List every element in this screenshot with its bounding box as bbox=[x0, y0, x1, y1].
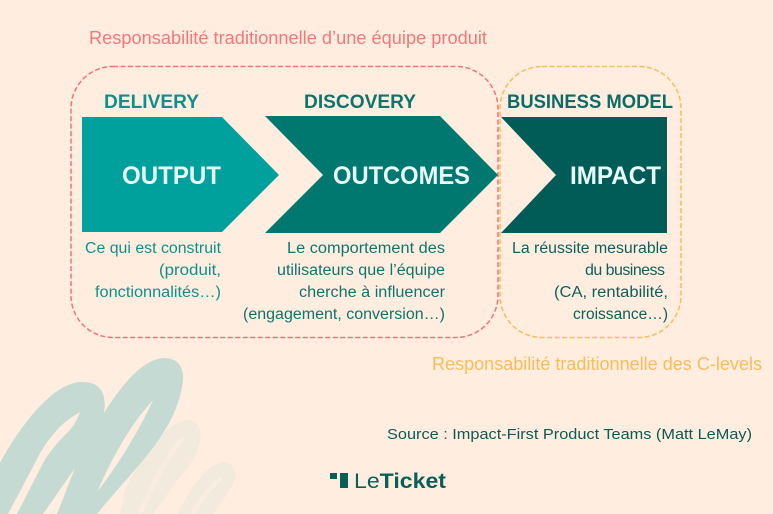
source note: Source : Impact-First Product Teams (Matt LeMay) bbox=[387, 426, 752, 443]
column: business model bbox=[501, 92, 673, 323]
description: impact: (CA, rentabilité, bbox=[554, 284, 668, 301]
description: impact: La réussite mesurable bbox=[512, 240, 668, 257]
arrow: outcomes bbox=[265, 116, 498, 233]
logo wordmark: LeTicket bbox=[354, 470, 446, 493]
description: impact: du business bbox=[585, 262, 665, 279]
heading: C-levels responsibility: Responsabilité traditionnelle des C-levels bbox=[432, 354, 762, 374]
description: outcomes: cherche à influencer bbox=[299, 284, 445, 301]
logo: LeTicket bbox=[330, 470, 446, 493]
description: outcomes: utilisateurs que l’équipe bbox=[277, 262, 445, 279]
label: discovery: DISCOVERY bbox=[304, 92, 416, 113]
description: output: fonctionnalités…) bbox=[95, 284, 221, 301]
arrow: impact bbox=[501, 117, 667, 233]
panel: C-levels dashed frame bbox=[500, 66, 681, 338]
description: impact: croissance…) bbox=[573, 306, 668, 323]
label: business model: BUSINESS MODEL bbox=[507, 92, 673, 113]
heading: product team responsibility: Responsabilité traditionnelle d’une équipe produit bbox=[89, 28, 487, 48]
description: impact bbox=[512, 240, 668, 323]
arrow label: impact: IMPACT bbox=[570, 162, 661, 190]
description: output: (produit, bbox=[159, 262, 221, 279]
description: outcomes bbox=[243, 240, 445, 323]
description: outcomes: Le comportement des bbox=[287, 240, 445, 257]
decorative brush scribble bbox=[0, 358, 235, 514]
column: delivery bbox=[82, 92, 279, 301]
description: outcomes: (engagement, conversion…) bbox=[243, 306, 445, 323]
arrow: output bbox=[82, 117, 279, 232]
logo mark bbox=[330, 473, 348, 488]
description: output: Ce qui est construit bbox=[85, 240, 222, 257]
label: delivery: DELIVERY bbox=[104, 92, 199, 113]
description: output bbox=[85, 240, 222, 301]
panel: product team dashed frame bbox=[71, 66, 498, 338]
column: discovery bbox=[243, 92, 498, 323]
arrow label: output: OUTPUT bbox=[122, 162, 221, 190]
arrow label: outcomes: OUTCOMES bbox=[333, 162, 470, 190]
